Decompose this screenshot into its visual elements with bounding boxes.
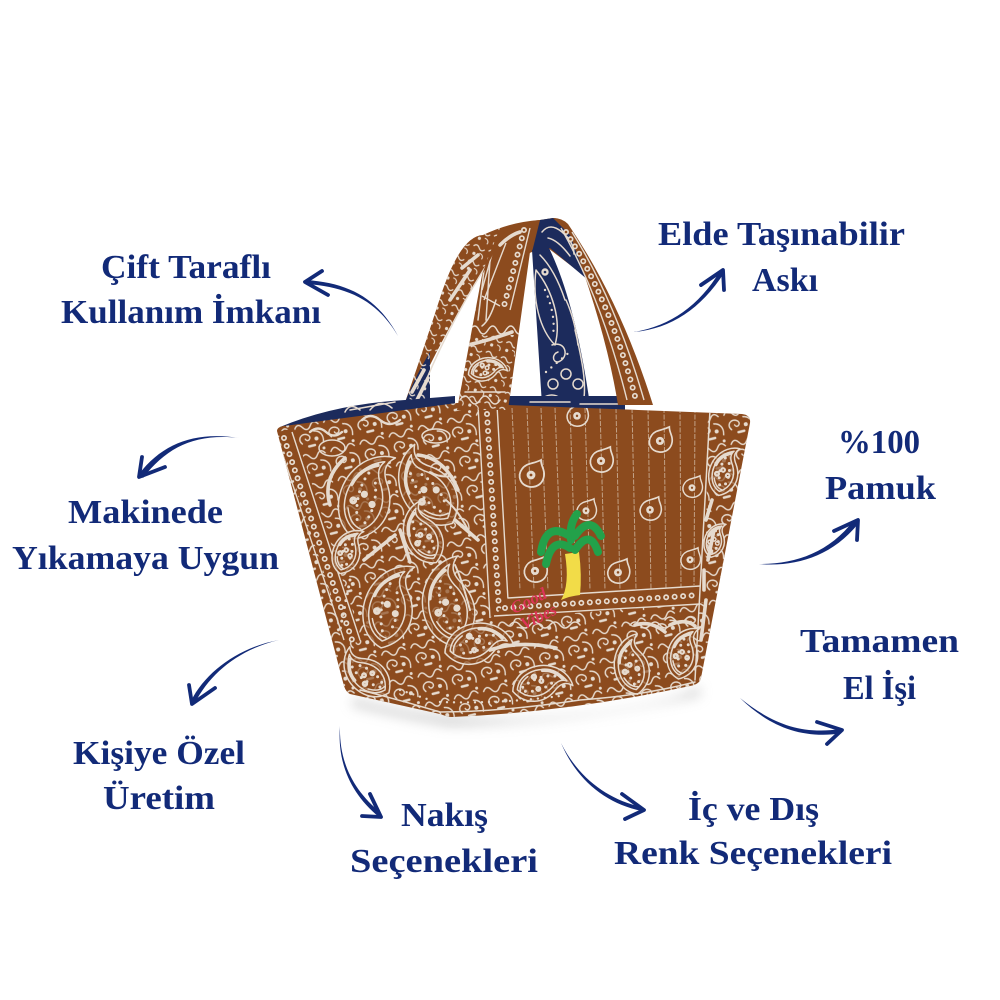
bottom bandana band (494, 586, 700, 618)
arrow: to custom production label (189, 640, 279, 704)
label: Çift Taraflı Kullanım İmkanı: Çift Taraflı (101, 249, 271, 286)
side gusset (695, 410, 742, 680)
label: Çift Taraflı Kullanım İmkanı (61, 249, 321, 331)
rim pattern (345, 402, 620, 412)
label: Tamamen El İşi: Tamamen (800, 623, 959, 660)
palm fronds (541, 514, 601, 564)
label: Makinede Yıkamaya Uygun: Yıkamaya Uygun (12, 540, 279, 577)
large paisley motifs (328, 442, 702, 708)
label: Kişiye Özel Üretim (73, 735, 245, 817)
arrow: to machine wash label (139, 436, 240, 478)
label: Makinede Yıkamaya Uygun: Makinede (68, 494, 223, 531)
small paisleys on pocket (520, 403, 703, 583)
front right handle strap (553, 218, 653, 405)
left border chain (278, 428, 362, 640)
arrow: to handle label (634, 270, 724, 332)
label: Kişiye Özel Üretim: Kişiye Özel (73, 735, 245, 772)
bag body (277, 403, 750, 717)
label: Tamamen El İşi (800, 623, 959, 707)
lace texture (270, 395, 760, 725)
back handle (403, 218, 587, 408)
scarf stripes on pocket (512, 408, 695, 590)
navy lining rim (280, 396, 625, 430)
label: İç ve Dış Renk Seçenekleri (614, 790, 892, 872)
label: %100 Pamuk: %100 (838, 424, 920, 461)
arrow: to handmade label (740, 698, 842, 744)
arrow: to cotton label (759, 520, 858, 565)
label: Makinede Yıkamaya Uygun (12, 494, 279, 577)
label: Çift Taraflı Kullanım İmkanı: Kullanım İmkanı (61, 293, 321, 331)
bag body pattern (270, 395, 760, 725)
embroidery: palm tree (507, 514, 601, 634)
label: İç ve Dış Renk Seçenekleri: İç ve Dış (688, 790, 819, 828)
vertical bandana band (478, 405, 508, 618)
front handle strap (455, 220, 540, 410)
embroidery: good vibes: Vibes (517, 600, 560, 634)
bag ground shadow (352, 686, 700, 726)
label: %100 Pamuk (825, 424, 936, 507)
paisley fillers (319, 429, 478, 630)
label: Kişiye Özel Üretim: Üretim (103, 780, 215, 817)
label: İç ve Dış Renk Seçenekleri: Renk Seçenekleri (614, 835, 892, 872)
label: %100 Pamuk: Pamuk (825, 470, 936, 507)
arrow: to colour options label (561, 743, 644, 819)
upper rim chain (310, 416, 400, 436)
arrow: to embroidery label (340, 726, 381, 817)
label: Elde Taşınabilir Askı (658, 216, 905, 299)
navy reverse side of handle (532, 218, 590, 405)
label: Nakış Seçenekleri (350, 797, 538, 880)
product: bandana tote bag (270, 218, 760, 726)
palm trunk (561, 552, 581, 600)
arrow: to Çift Taraflı (305, 271, 398, 336)
label: Tamamen El İşi: El İşi (843, 669, 916, 707)
label: Nakış Seçenekleri: Nakış (401, 797, 488, 834)
wavy bottom lines (360, 617, 695, 712)
label: Elde Taşınabilir Askı: Askı (752, 262, 818, 299)
embroidery: good vibes: Good (507, 584, 550, 618)
label: Elde Taşınabilir Askı: Elde Taşınabilir (658, 216, 905, 253)
label: Nakış Seçenekleri: Seçenekleri (350, 843, 538, 880)
embroidery: good vibes (507, 584, 560, 634)
